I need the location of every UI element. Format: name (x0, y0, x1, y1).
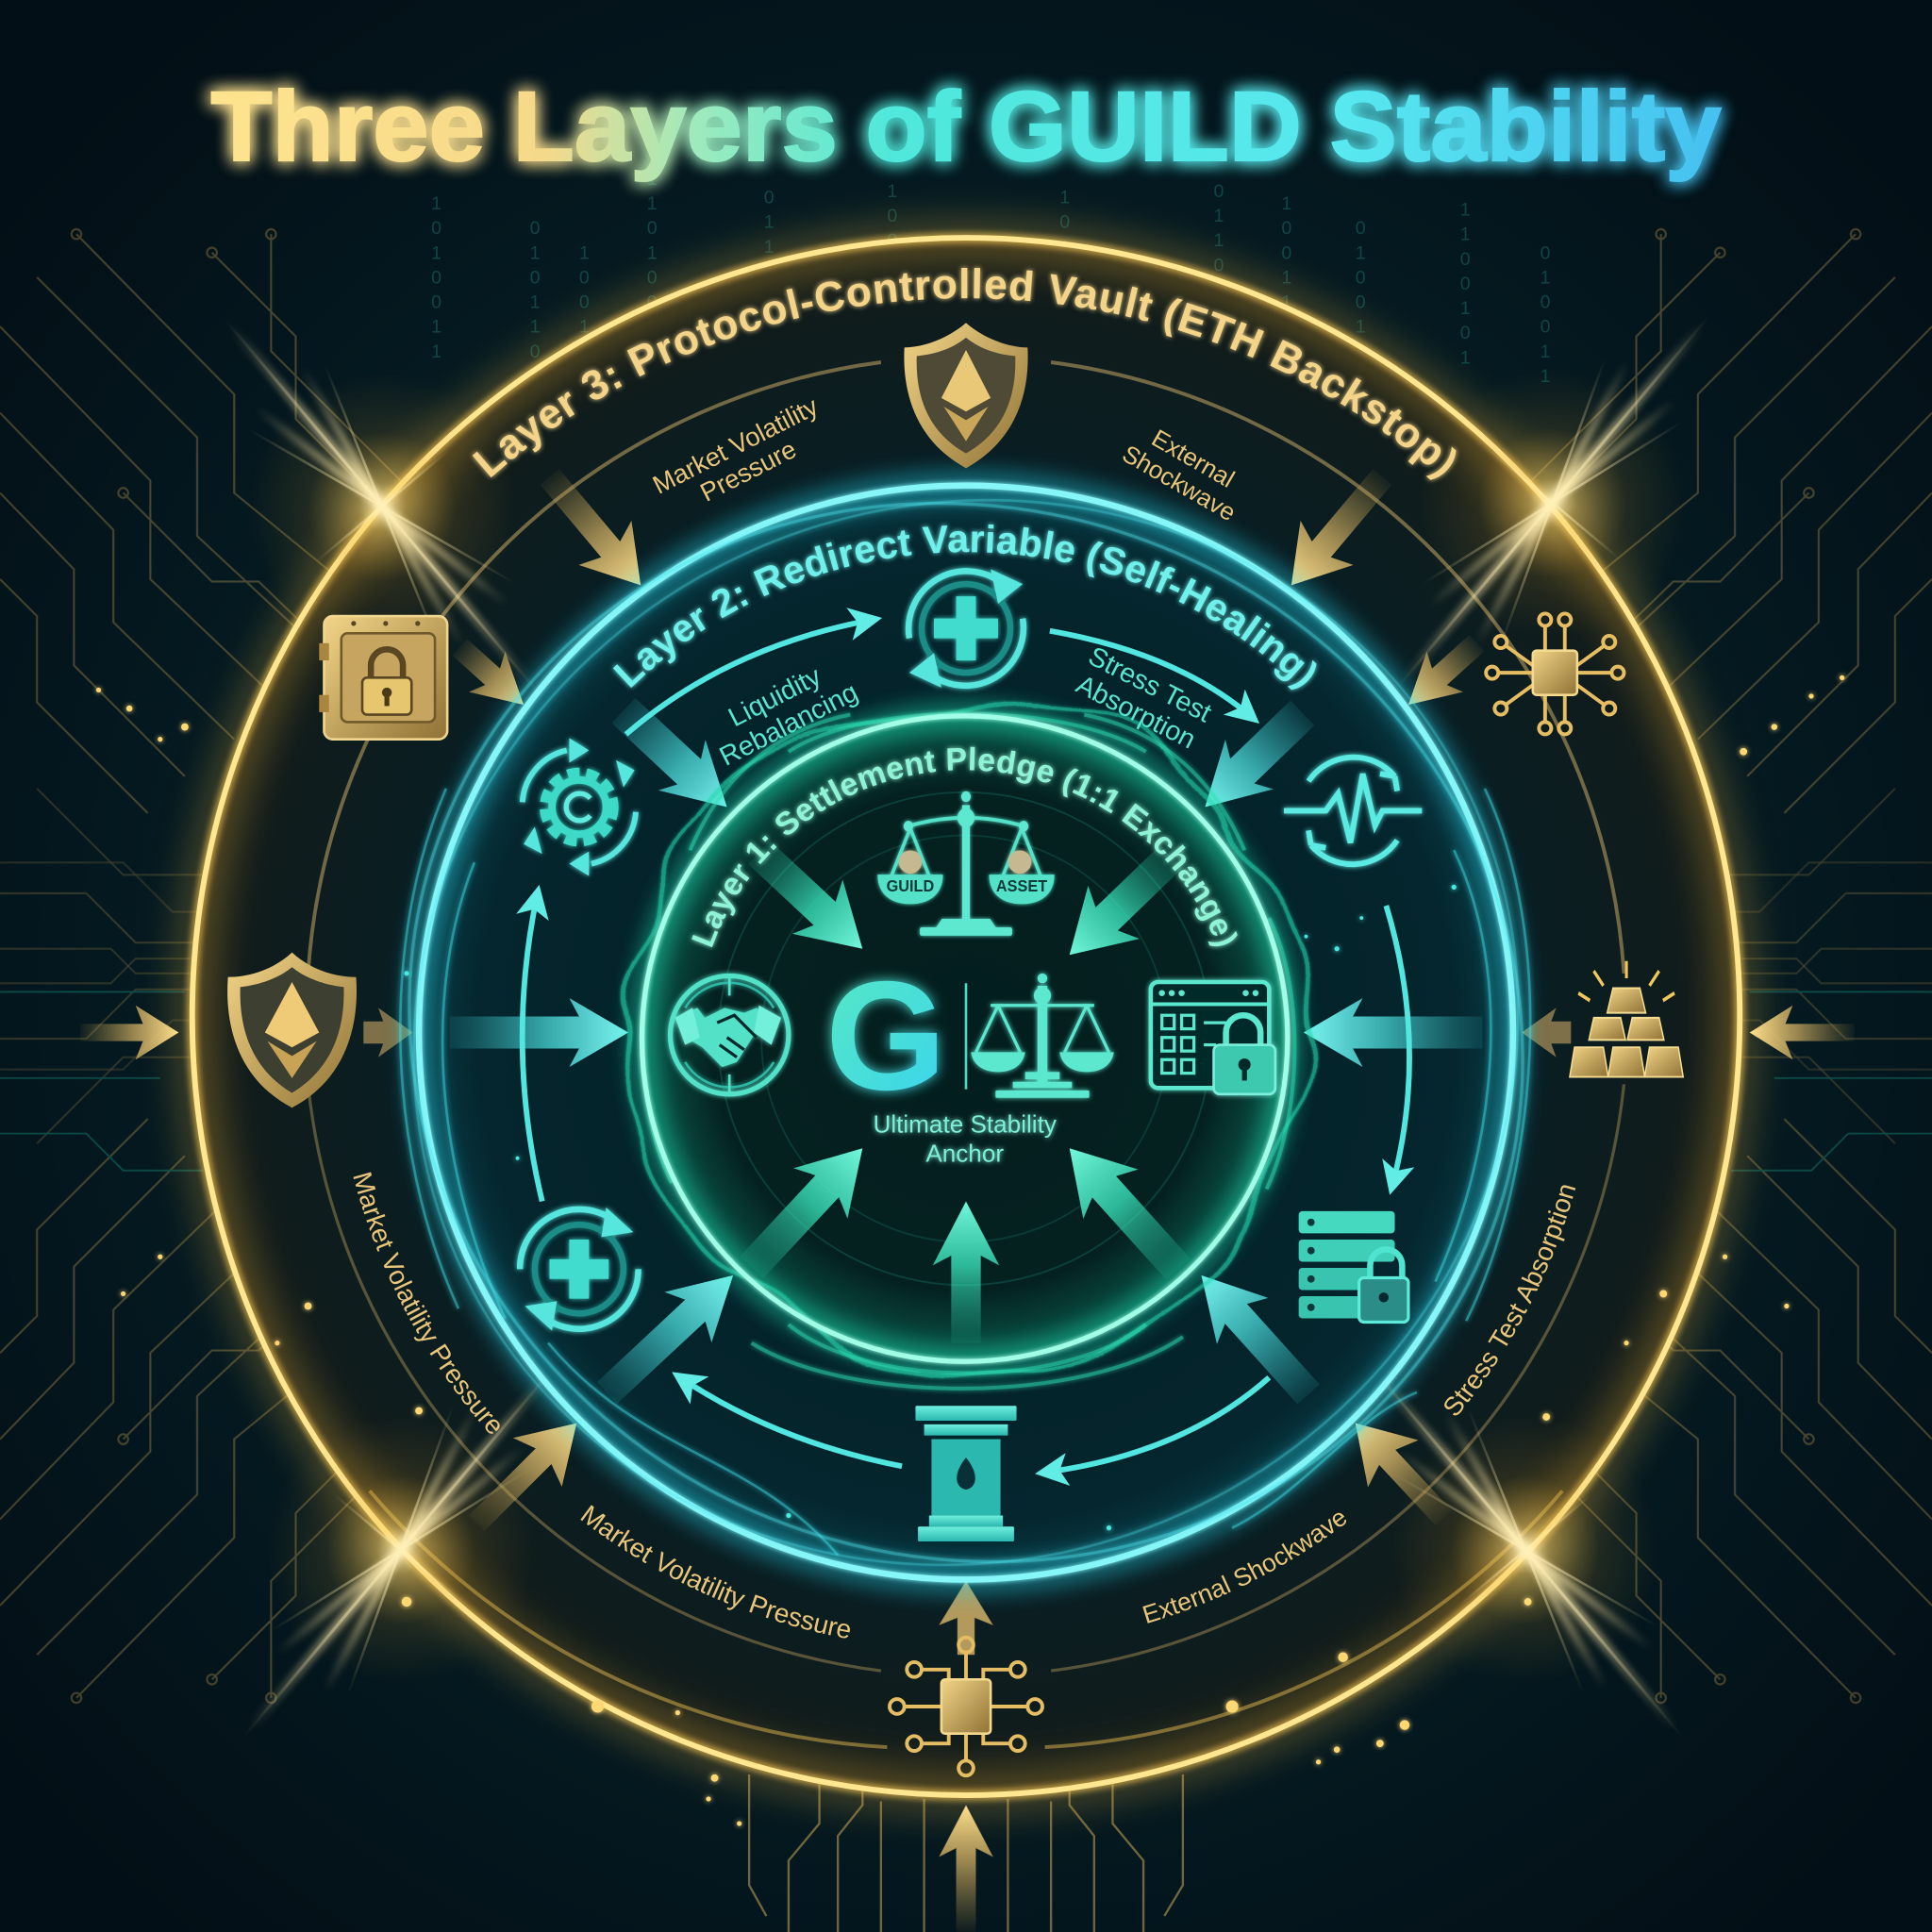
arrow: curve to stress (1050, 631, 1252, 717)
sparkles (96, 675, 1844, 1826)
binary digit rain: 01001 (1356, 218, 1366, 338)
arrow: chip to teal (939, 1581, 993, 1655)
binary digit rain: 1001 (887, 181, 897, 275)
arrow: shield to teal (363, 1008, 413, 1058)
divider between logo and scale (965, 983, 967, 1090)
binary digit rain: 1101001 (647, 169, 658, 338)
icon: pillar (915, 1406, 1017, 1541)
arrow: teal bottom left (583, 1250, 757, 1418)
arrow: curve bottom right (1045, 1377, 1269, 1473)
arrow: far right (1750, 1006, 1855, 1059)
icon: centre scale (971, 974, 1114, 1098)
arrow: bottom left (452, 1399, 601, 1548)
layer 2 label: Layer 2: Redirect Variable (Self-Healing) (610, 521, 1321, 693)
icon: self-healing lower left (520, 1208, 639, 1331)
label: market volatility pressure left: Market Volatility Pressure (353, 1172, 500, 1434)
arrow: curve to heal icon (626, 620, 873, 734)
layer 1 inner ring (626, 700, 1304, 1389)
icon: ETH shield left (227, 953, 357, 1108)
label: liquidity rebalancing: Liquidity (724, 661, 826, 733)
label: stress test absorption right: Stress Test Absorption (1444, 1185, 1575, 1415)
icon: gold bars (1570, 961, 1683, 1077)
arrow: teal right (1304, 998, 1482, 1067)
arrow: bottom outer (939, 1805, 993, 1932)
arrow: market pressure top left (524, 455, 667, 608)
logo: G: G (825, 949, 946, 1123)
icon: calendar lock (1151, 982, 1275, 1094)
arrow: curve bottom left (680, 1377, 902, 1466)
icon: vault (319, 616, 447, 740)
green inner arrows (724, 825, 1206, 1343)
layer 3 outer ring (192, 238, 1740, 1795)
icon: heartbeat (1284, 758, 1422, 864)
binary digit rain: 10110 (1059, 188, 1070, 307)
binary digit rain: 011010 (1214, 181, 1224, 325)
arrow: inner top left (734, 825, 888, 975)
label: market volatility pressure bottom: Market Volatility Pressure (580, 1505, 850, 1638)
arrow: curve down right (1386, 906, 1409, 1185)
label: external shockwave top: External (1147, 424, 1240, 493)
label: market volatility pressure top: Market Volatility (648, 391, 823, 500)
icon: server lock (1299, 1211, 1408, 1322)
layer 1 label: Layer 1: Settlement Pledge (1:1 Exchange) (689, 743, 1241, 951)
arrow: far left (80, 1006, 178, 1059)
arrow: chip (1391, 623, 1495, 724)
icon: handshake (671, 975, 789, 1094)
icon: self-healing top (908, 569, 1024, 688)
icon: ETH shield top (904, 323, 1028, 468)
title: Three Layers of GUILD Stability (210, 72, 1722, 182)
icon: balance scale with GUILD and ASSET (877, 791, 1055, 936)
arrow: inner top right (1043, 830, 1197, 981)
binary digit rain: 1100101 (1460, 200, 1471, 368)
arrow: teal left (450, 998, 628, 1067)
icon: chip right (1486, 613, 1624, 734)
arrow: inner bottom (933, 1201, 999, 1343)
layer 3 label: Layer 3: Protocol-Controlled Vault (ETH Backstop) (470, 264, 1460, 483)
label: stress test absorption top: Absorption (1072, 670, 1200, 756)
binary digit rain (431, 169, 1551, 387)
icon: chip bottom (890, 1638, 1042, 1775)
arrow: inner bottom left (724, 1124, 890, 1292)
icon: balance scale with GUILD and ASSET: ASSET (996, 876, 1048, 895)
arrow: teal top left (600, 685, 751, 832)
binary digit rain: 010110 (530, 218, 541, 362)
arrow: teal bottom right (1175, 1252, 1334, 1417)
binary digit rain: 010011 (1541, 242, 1551, 387)
icon: gear (523, 738, 636, 876)
binary digit rain: 1010011 (431, 193, 441, 362)
label: external shockwave top: Shockwave (1118, 440, 1241, 526)
binary digit rain: 1001101 (1281, 193, 1291, 362)
curved circulation arrows (523, 620, 1409, 1473)
arrow: vault (441, 627, 541, 724)
label: market volatility pressure top: Pressure (695, 434, 801, 508)
flares on outer ring (120, 226, 1815, 1826)
outer gold arrows (80, 455, 1855, 1932)
icon: balance scale with GUILD and ASSET: GUILD (887, 876, 934, 895)
bottom centre traces (749, 1774, 1183, 1932)
label: liquidity rebalancing: Rebalancing (715, 677, 863, 773)
layer 2 teal ring (242, 325, 1690, 1740)
arrow: shockwave top right (1265, 455, 1408, 608)
label: ultimate stability anchor: Ultimate Stability (873, 1109, 1057, 1138)
circuit traces background (0, 229, 1932, 1703)
label: external shockwave bottom: External Shockwave (1142, 1513, 1347, 1624)
arrow: inner bottom right (1042, 1124, 1206, 1294)
arrow: bars to teal (1522, 1008, 1571, 1058)
label: ultimate stability anchor: Anchor (925, 1140, 1004, 1168)
binary digit rain: 01101 (764, 188, 774, 307)
teal arrows (450, 685, 1482, 1418)
arrow: teal top right (1181, 688, 1326, 832)
binary digit rain: 10010 (579, 242, 590, 362)
label: stress test absorption top: Stress Test (1083, 641, 1216, 728)
arrow: bottom right (1330, 1400, 1469, 1541)
arrow: curve up left (523, 894, 542, 1201)
